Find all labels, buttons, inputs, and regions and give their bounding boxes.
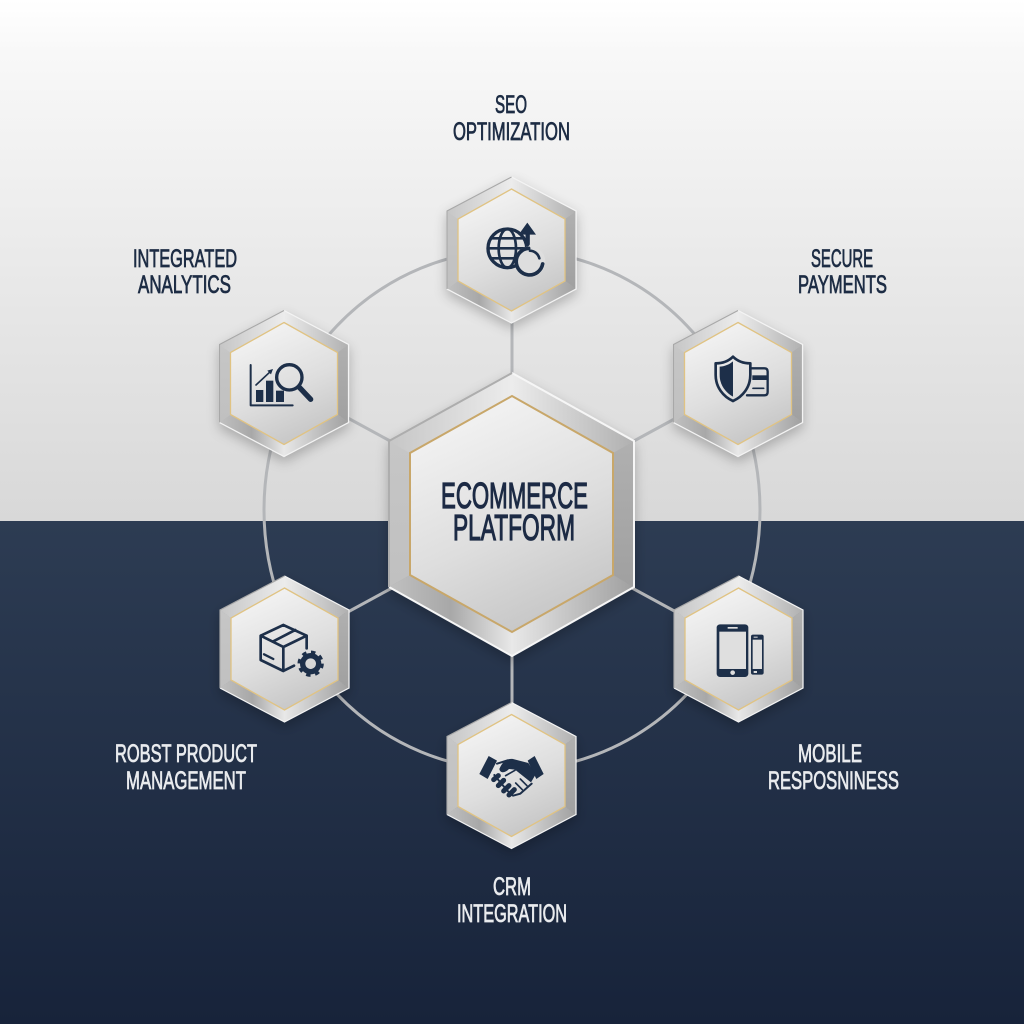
label: Secure Payments: [798, 245, 887, 299]
label: CRM Integration: CRM: [493, 873, 531, 901]
node: Secure Payments hexagon: [674, 310, 802, 456]
label: Robst Product Management: MANAGEMENT: [126, 767, 246, 795]
icon: shield and card: [716, 357, 768, 401]
node: SEO Optimization hexagon: [447, 177, 576, 323]
label: Mobile Responsiveness: [768, 740, 899, 795]
label: CRM Integration: [457, 873, 567, 928]
label: Mobile Responsiveness: RESPOSNINESS: [768, 767, 899, 795]
label: SEO Optimization: SEO: [495, 91, 527, 119]
label: Robst Product Management: [115, 740, 257, 795]
central hexagon: Ecommerce Platform: ECOMMERCE: [441, 475, 588, 516]
icon: handshake: [479, 756, 544, 796]
label: Mobile Responsiveness: MOBILE: [798, 740, 862, 768]
node: Robust Product Management hexagon: [220, 576, 349, 722]
node: Mobile Responsiveness hexagon: [674, 576, 803, 722]
label: SEO Optimization: OPTIMIZATION: [453, 118, 570, 146]
node: Integrated Analytics hexagon: [220, 310, 348, 456]
label: Integrated Analytics: ANALYTICS: [138, 271, 231, 299]
icon: phone and small phone: [717, 624, 764, 677]
icon: globe with arrow and refresh: [488, 223, 545, 277]
connector ring and spokes: [264, 250, 760, 770]
central hexagon: Ecommerce Platform: [389, 373, 634, 656]
label: Secure Payments: PAYMENTS: [798, 271, 887, 299]
icon: box and gear: [261, 625, 322, 675]
label: Integrated Analytics: INTEGRATED: [133, 245, 237, 273]
background: navy lower half: [0, 521, 1024, 1024]
background: light upper half: [0, 0, 1024, 521]
label: CRM Integration: INTEGRATION: [457, 900, 567, 928]
label: Robst Product Management: ROBST PRODUCT: [115, 740, 257, 768]
node: CRM Integration hexagon: [447, 702, 576, 848]
label: Integrated Analytics: [133, 245, 237, 299]
label: Secure Payments: SECURE: [811, 245, 873, 273]
central hexagon: Ecommerce Platform: PLATFORM: [453, 507, 575, 548]
label: SEO Optimization: [453, 91, 570, 146]
icon: bar chart with magnifier: [251, 365, 311, 405]
